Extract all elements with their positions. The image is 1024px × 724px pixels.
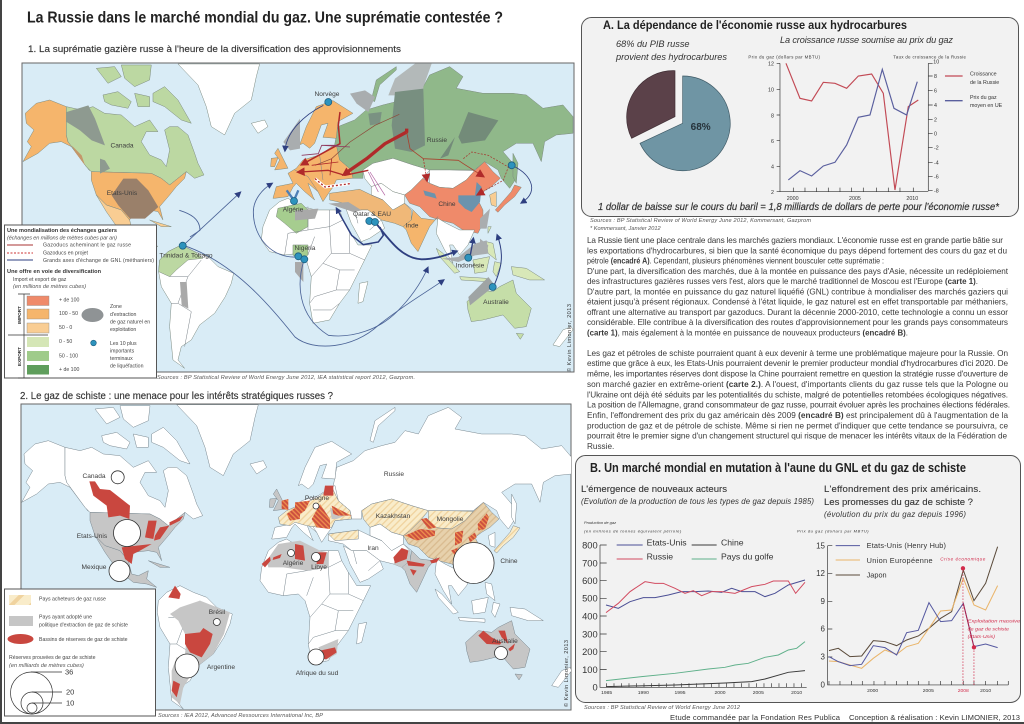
legend: map 2: 10 [66, 698, 74, 708]
legend: map 1: Import et export de gaz [13, 277, 67, 283]
line chart: gas production: Russie [647, 552, 673, 562]
line chart: gas prices: 6 [821, 625, 826, 634]
line chart: growth vs gas price: Prix du gaz [970, 95, 997, 101]
line chart: gas prices [797, 528, 1021, 694]
line chart: growth vs gas price: -8 [934, 189, 939, 195]
heading: map 2: 2. Le gaz de schiste : une menace pour les intérêts stratégiques russes ? [20, 391, 333, 402]
line chart: gas production: Production de gaz [584, 520, 616, 525]
map 2 place names [77, 471, 518, 677]
map 1 place names: Russie [427, 137, 447, 144]
body text: Les gaz et pétroles de schiste pourraient quant à eux devenir à terme une problématique majeure pour la Russie. On [587, 349, 1008, 358]
line chart: growth vs gas price: 10 [933, 59, 939, 65]
shale basins [89, 481, 515, 697]
copyright map 2: © Kevin Limonier, 2013 [563, 640, 570, 707]
chart annotations: Exploitation massive [968, 619, 1021, 624]
line chart: gas prices: 2010 [980, 688, 991, 694]
body text: La Russie tient une place centrale dans les marchés gaziers mondiaux. L'économie russe est en grande partie bâtie sur [587, 236, 1003, 245]
line chart: gas prices: 9 [821, 597, 826, 606]
panel A heading: A. La dépendance de l'économie russe aux hydrocarbures [603, 18, 907, 32]
line chart: growth vs gas price: 2 [771, 190, 774, 196]
subheading: new players: (Evolution de la production de tous les types de gaz depuis 1985) [581, 497, 814, 506]
sources: panel B: Sources : BP Statistical Review of World Energy June 2012 [584, 705, 741, 711]
line chart: growth vs gas price: -2 [934, 146, 939, 152]
line chart: gas production: 500 [582, 594, 598, 604]
line chart: gas prices: Etats-Unis (Henry Hub) [867, 541, 946, 550]
map 1 overlays: extraction zones, pipelines and LNG routes [67, 64, 532, 346]
legend: map 1: Grands axes d'échange de GNL (méthaniers) [43, 258, 154, 264]
line chart: gas production: 1990 [638, 690, 649, 696]
map 2 place names: Mongolie [437, 516, 464, 523]
panel B: changing world market [576, 456, 1021, 702]
heading: map 1: 1. La suprématie gazière russe à l'heure de la diversification des approvisionnements [28, 44, 401, 55]
line chart: growth vs gas price: 4 [934, 103, 937, 109]
line chart: growth vs gas price [748, 54, 1003, 202]
line chart: gas production: 200 [582, 647, 598, 657]
line chart: gas production: 2000 [714, 690, 726, 696]
line chart: gas production: 2005 [753, 690, 764, 696]
legend: map 1: Gazoducs en projet [43, 250, 89, 256]
map 2 land [22, 405, 572, 709]
line chart: growth vs gas price: 8 [934, 74, 937, 80]
map 1 land [23, 64, 573, 368]
sources: map 1: Sources : BP Statistical Review of World Energy June 2012, IEA statistical report 2012, Gazprom. [157, 375, 415, 381]
line chart: gas production: 400 [582, 611, 598, 621]
line chart: gas prices: 2008 [958, 688, 969, 694]
body text: son marché gazier en extrême-orient (carte 2.). A l'ouest, d'importants clients du gaz russe tels que la Pologne ou [587, 380, 1008, 389]
chart annotations [940, 557, 1021, 639]
body text: pétrole (encadré A). Cependant, plusieurs phénomènes viennent bousculer cette suprématie : [587, 256, 884, 266]
body text: des infrastructures gazières russes vers l'est, alors que le marché traditionnel de Moscou est l'Europe (carte 1). [587, 277, 978, 286]
line chart: gas production [582, 520, 807, 696]
legend: map 2: Bassins de réserves de gaz de schiste [39, 637, 128, 643]
line chart: gas production: 300 [582, 629, 598, 639]
line chart: gas prices: 0 [821, 681, 826, 690]
map 1 place names: Canada [110, 142, 134, 150]
legend: map 1 [4, 225, 156, 378]
body text: D'autre part, la montée en puissance du gaz naturel liquéfié (GNL) contribue à mondialiser des marchés gaziers qui [587, 287, 1008, 296]
choropleth scale [27, 296, 49, 374]
map 1 place names: Etats-Unis [107, 190, 138, 197]
map 2 place names: Australie [492, 638, 518, 645]
line chart: growth vs gas price: -6 [934, 175, 939, 181]
body text: production de gaz et de pétrole de schiste. Même si rien ne permet d'indiquer que cette tendance se poursuivra, ce [587, 421, 1008, 430]
legend: map 2: politique d'extraction de gaz de schiste [39, 622, 128, 628]
body text: La position de l'Allemagne, grand consommateur de gaz russe, pourrait évoluer après les prochaines élections fédérales. [587, 401, 1010, 410]
line chart: gas prices: 15 [816, 541, 826, 550]
copyright: © Kevin Limonier, 2013 [566, 304, 573, 372]
pie caption: 68% du PIB russe [616, 39, 690, 49]
map 1 place names: Norvège [315, 91, 340, 98]
body text: Russie. [587, 442, 614, 451]
subheading: US price collapse [824, 484, 981, 519]
legend: map 1: Zone [110, 304, 122, 310]
map 2 place names: Pologne [305, 495, 329, 502]
map 2 place names: Brésil [209, 609, 226, 616]
chart annotations: (Etats-Unis) [968, 634, 995, 639]
body text: estime que grâce à eux, les Etats-Unis pourraient devenir le premier producteur mondial d'hydrocarbures d'ici 2020. De [587, 359, 1008, 368]
line chart: gas prices: 2000 [867, 688, 878, 694]
line chart: gas production: 2010 [791, 690, 802, 696]
pie chart: 68% [627, 71, 730, 171]
legend: map 1: 100 - 50 [59, 311, 78, 317]
line chart: gas production: Pays du golfe [721, 552, 774, 562]
line chart: growth vs gas price: 2 [934, 117, 937, 123]
subheading: new players [581, 484, 814, 506]
map 2 place names: Kazakhstan [376, 513, 411, 520]
reserve circles [109, 471, 508, 678]
sources: panel A [590, 218, 811, 232]
legend: map 2: Pays ayant adopté une [39, 614, 92, 620]
legend: map 1: de gaz naturel en [110, 320, 150, 326]
legend: map 1: de liquéfaction [110, 364, 144, 370]
legend: map 2: (en milliards de mètres cubes) [9, 663, 84, 669]
line chart: growth vs gas price: 0 [934, 131, 937, 137]
body text: considérable. Elle contribue à la diversification des routes d'approvisionnement pour les grands pays consommateurs [587, 318, 1008, 327]
legend: map 1: (en millions de mètres cubes) [13, 284, 86, 290]
pie chart: 68%: 68% [691, 122, 711, 133]
map 2 place names: Chine [500, 558, 518, 565]
body text: Enfin, l'effondrement des prix du gaz américain dès 2009 (encadré B) est principalement dû à l'augmentation de la [587, 411, 1008, 420]
legend: map 1: exploitation [110, 327, 136, 333]
line chart: growth vs gas price: de la Russie [970, 80, 999, 86]
line chart: gas prices: Union Européenne [867, 556, 933, 565]
line chart: growth vs gas price: 2005 [849, 196, 861, 202]
chart annotations: Crise économique [940, 557, 986, 562]
line chart: growth vs gas price: 2000 [787, 196, 799, 202]
body text: offrant une alternative au transport par gazoducs. Durant la décennie 2000-2010, cette technologie a connu un essor [587, 308, 1008, 317]
line chart: gas production: 100 [582, 665, 598, 675]
credits: Etude commandée par la Fondation Res Publica [670, 713, 841, 722]
body text: D'une part, la diversification des marchés, due à la montée en puissance des pays d'Asie, nécessite un redéploiement [587, 267, 1009, 276]
body text: (carte 1), mais également à la montée en puissance de nouveaux producteurs (encadré B). [587, 328, 908, 338]
map 1 place names: Qatar & EAU [353, 211, 391, 218]
map 2 place names: Afrique du sud [296, 670, 339, 677]
title: La Russie dans le marché mondial du gaz. Une suprématie contestée ? [27, 10, 503, 26]
line chart: gas production: 1985 [601, 690, 612, 696]
line chart: growth vs gas price: Croissance [970, 72, 997, 78]
panel A: dependence on hydrocarbons [582, 18, 1018, 216]
Russian pipelines [300, 112, 508, 195]
map 1 place names: Chine [438, 201, 456, 208]
legend: map 2: 20 [66, 688, 74, 696]
body text: étaient jusqu'à présent régionaux. Condensé à l'état liquide, le gaz naturel est en effet transportable par méthaniers, [587, 298, 1008, 307]
pie caption: provient des hydrocarbures [615, 52, 727, 62]
map 2: shale gas [21, 404, 572, 710]
line chart: growth vs gas price: moyen en UE [970, 103, 1003, 109]
line chart: growth vs gas price: 8 [771, 113, 774, 119]
map 2 place names: Etats-Unis [77, 533, 108, 540]
chart annotations: de gaz de schiste [968, 627, 1009, 632]
line chart: growth vs gas price: 12 [768, 62, 774, 68]
sources: panel A: Sources : BP Statistical Review of World Energy June 2012, Kommersant, Gazprom [590, 218, 811, 224]
legend: map 1: EXPORT [17, 347, 22, 366]
line chart: growth vs gas price: Taux de croissance de la Russie [893, 54, 967, 59]
legend: map 1: 0 - 50 [59, 339, 72, 345]
legend: map 2: 36 [65, 668, 73, 676]
map 2 place names: Argentine [207, 664, 235, 671]
line chart: gas production: 0 [592, 683, 598, 693]
line chart: gas production: 600 [582, 576, 598, 586]
legend: map 1: d'extraction [110, 312, 136, 318]
line chart: gas production: Chine [721, 538, 744, 548]
line chart: gas production: 700 [582, 558, 598, 568]
line chart: gas prices: 2005 [923, 688, 934, 694]
map 2 place names: Mexique [82, 564, 107, 571]
line chart: gas prices: Japon [867, 571, 887, 580]
subheading: new players: L'émergence de nouveaux acteurs [581, 484, 727, 495]
map 1 place names: Algérie [283, 206, 304, 214]
body text: même, les importantes réserves dont dispose la Chine pourraient remettre en question la stratégie russe d'ouverture de [587, 370, 1008, 378]
legend: map 1: (échanges en millions de mètres cubes par an) [7, 236, 117, 242]
map 1 place names [107, 91, 509, 306]
line chart: gas prices: Prix du gaz (dollars par MBTU) [797, 528, 869, 533]
legend: map 1: Une mondialisation des échanges gaziers [7, 228, 117, 234]
map 1 place names: Nigeria [295, 245, 316, 252]
extraction zones [67, 64, 498, 309]
line chart: growth vs gas price: 4 [771, 165, 774, 171]
line chart: gas production: Etats-Unis [647, 538, 687, 548]
map 2 place names: Canada [82, 473, 106, 480]
pie caption [615, 39, 727, 62]
legend: map 2: Réserves prouvées de gaz de schiste [9, 655, 96, 661]
importers of Russian gas [278, 487, 358, 541]
line chart: growth vs gas price: 6 [934, 89, 937, 95]
line chart: gas prices: 3 [821, 653, 826, 662]
line chart: gas prices: 12 [816, 569, 826, 578]
subheading: US price collapse: (évolution du prix du gaz depuis 1996) [824, 510, 966, 519]
body text [587, 236, 1010, 451]
subheading: US price collapse: L'effondrement des prix américains. [824, 484, 981, 495]
map 1 place names: Australie [483, 299, 509, 306]
legend: map 2: Pays acheteurs de gaz russe [39, 596, 106, 602]
legend: map 1: terminaux [110, 356, 133, 362]
sources: panel A: * Kommersant, Janvier 2012 [590, 226, 661, 232]
map 2 place names: Algérie [283, 560, 304, 567]
legend: map 1: Les 10 plus [110, 341, 137, 347]
legend: map 1: IMPORT [17, 306, 22, 324]
legend: map 1: importants [110, 348, 135, 354]
line chart: gas production: 1995 [674, 690, 686, 696]
LNG terminals [179, 98, 515, 290]
legend: map 2 [4, 589, 156, 716]
map 1 place names: Inde [406, 222, 419, 230]
line chart: gas production: (en millions de tonnes équivalent pétrole) [584, 528, 682, 533]
panel B heading: B. Un marché mondial en mutation à l'aune du GNL et du gaz de schiste [590, 461, 966, 475]
line chart: growth vs gas price: Prix du gaz (dollars par MBTU) [748, 54, 821, 59]
legend: map 1: Gazoducs acheminant le gaz russe [43, 242, 131, 248]
legend: map 1: 50 - 0 [59, 325, 72, 331]
chart subtitle: La croissance russe soumise au prix du gaz [780, 35, 953, 45]
body text: l'Ukraine ont déjà été séduits par les potentialités du schiste, malgré de potentielles retombées écologiques négatives. [587, 390, 1008, 399]
credits: Conception & réalisation : Kevin LIMONIER, 2013 [849, 713, 1020, 722]
legend: map 1: + de 100 [59, 298, 79, 304]
proportional circles scale [10, 672, 62, 714]
map 2 place names: Iran [367, 545, 379, 552]
line chart: growth vs gas price: 6 [771, 139, 774, 145]
body text: pourrait être le premier signe d'un changement structurel qui risque de menacer les intérêts vitaux de la Fédération de [587, 432, 1007, 441]
legend: map 1: Une offre en voie de diversification [7, 269, 102, 275]
map 1 place names: Indonésie [456, 262, 485, 270]
legend: map 1: 50 - 100 [59, 354, 78, 360]
LNG tanker routes [179, 105, 532, 346]
sources: map 2: Sources : IEA 2012, Advanced Ressources International Inc, BP [158, 713, 323, 719]
map 1 place names: Trinidad & Tobago [159, 252, 213, 260]
line chart: growth vs gas price: 2010 [906, 196, 918, 202]
map 2 place names: Libye [311, 564, 327, 571]
map 2 place names: Russie [384, 471, 404, 478]
subheading: US price collapse: Les promesses du gaz de schiste ? [824, 497, 973, 508]
legend: map 1: + de 100 [59, 367, 79, 373]
line chart: growth vs gas price: -4 [934, 160, 939, 166]
grey shale policy countries [170, 507, 410, 704]
line chart: growth vs gas price: 10 [768, 88, 774, 94]
body text: les exportations d'hydrocarbures, si bien que la santé économique du pays dépend fortement des cours du gaz et du [587, 246, 1007, 255]
credits [670, 713, 1020, 722]
map 1: gas supply [22, 63, 574, 372]
line chart: gas production: 800 [582, 540, 598, 550]
